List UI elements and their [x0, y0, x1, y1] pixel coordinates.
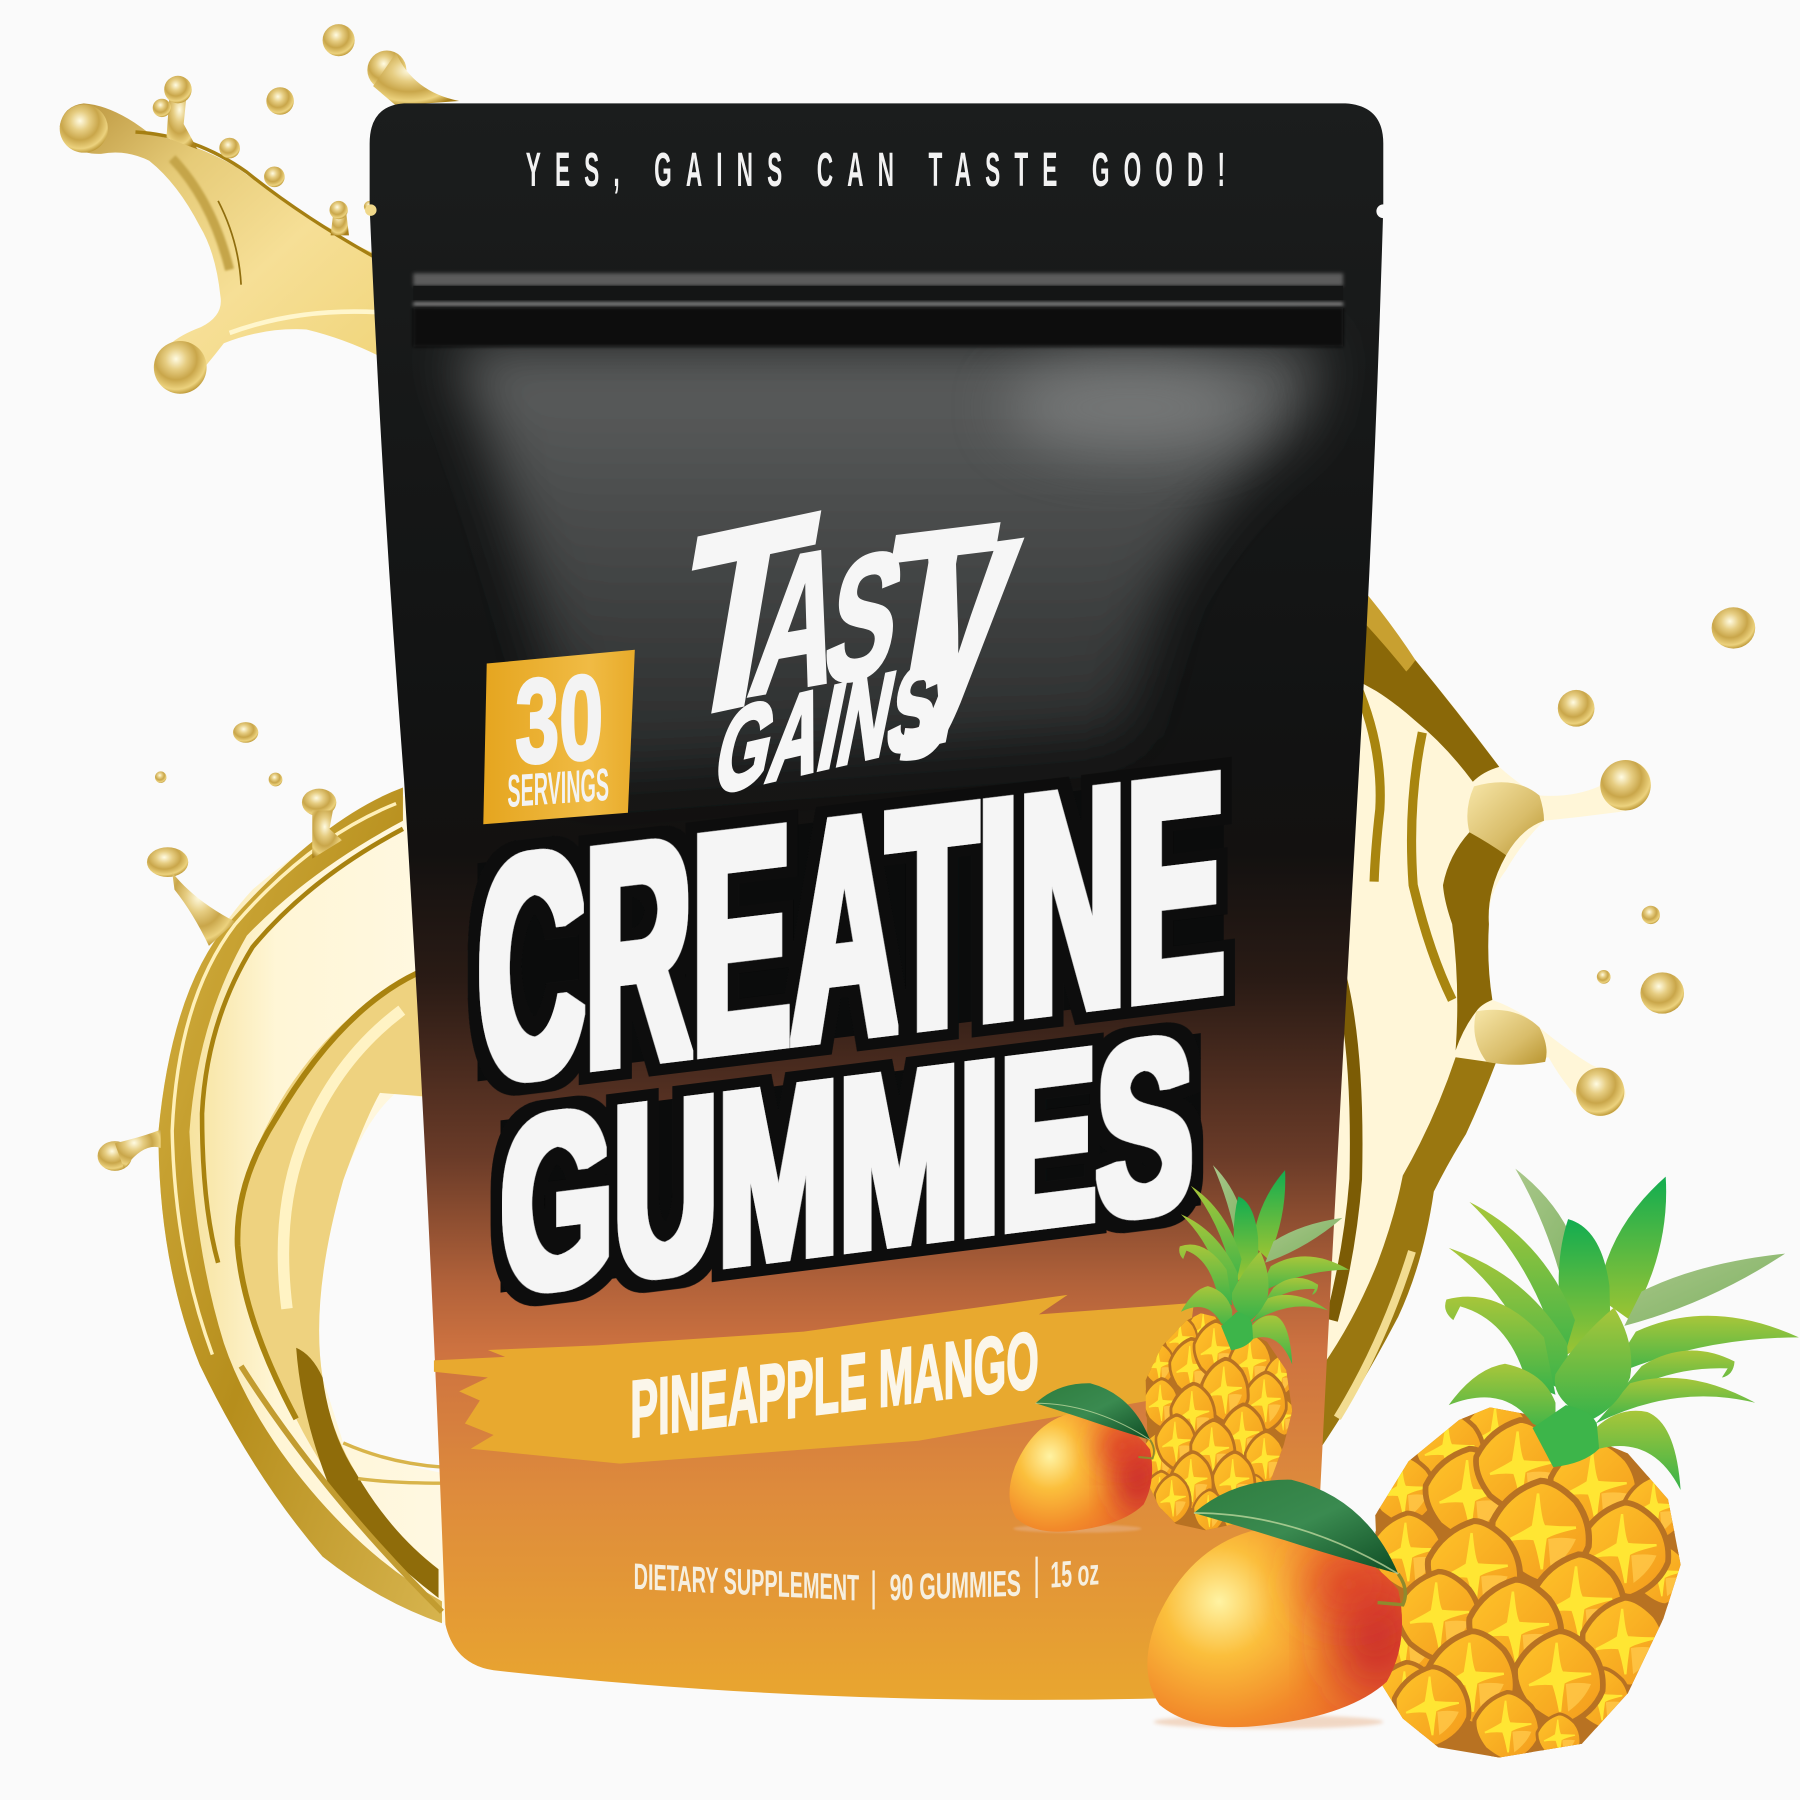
footer: 90 GUMMIES	[890, 1564, 1021, 1609]
big pineapple	[1363, 1169, 1799, 1763]
droplets: right	[1558, 607, 1755, 1116]
splash: left ring	[98, 722, 453, 1626]
logo: Tasty Gains: A	[739, 505, 858, 738]
droplets: top-left	[60, 24, 459, 394]
small pineapple	[1140, 1165, 1349, 1534]
tagline: YES, GAINS CAN TASTE GOOD!	[526, 142, 1225, 196]
logo: Tasty Gains: y	[892, 435, 1041, 763]
footer: 15 oz	[1050, 1552, 1099, 1596]
small mango	[1009, 1383, 1159, 1533]
logo: Tasty Gains: GAINS!	[705, 631, 974, 821]
flavour label: PINEAPPLE MANGO	[630, 1314, 1039, 1455]
outer gold band	[158, 788, 442, 1623]
logo: Tasty Gains: T	[862, 478, 1008, 730]
footer: DIETARY SUPPLEMENT	[634, 1556, 859, 1609]
badge: 30 servings: 30	[515, 650, 603, 789]
big mango	[1147, 1480, 1414, 1729]
logo: Tasty Gains	[656, 435, 1041, 821]
badge: 30 servings: SERVINGS	[507, 760, 609, 817]
heading: gummies: GUMMIES	[501, 984, 1193, 1345]
droplets: left	[98, 722, 342, 1171]
heading: creatine: CREATINE	[478, 706, 1225, 1149]
badge: 30 servings	[483, 650, 635, 824]
notches	[365, 204, 377, 216]
logo: Tasty Gains: T	[656, 456, 831, 777]
pouch	[365, 103, 1390, 1700]
splash: right liquid	[1297, 588, 1755, 1449]
inner gold strand	[238, 973, 439, 1598]
logo: Tasty Gains: S	[813, 513, 916, 723]
splash: top-left liquid	[60, 24, 459, 394]
footer	[634, 1552, 1099, 1609]
brush stroke	[434, 1295, 1194, 1464]
